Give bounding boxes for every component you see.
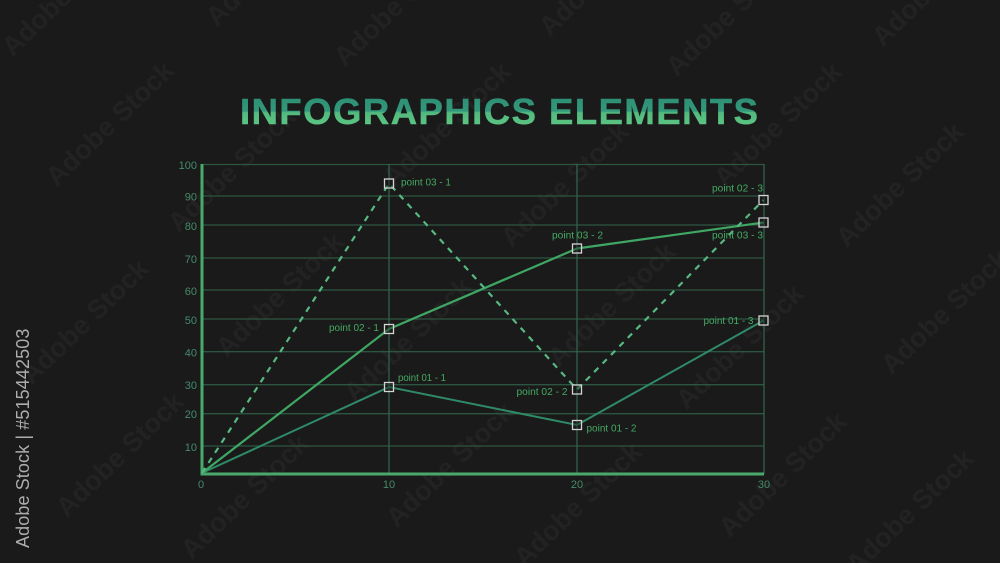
point labels: point 01 - 3	[704, 315, 754, 327]
series 01 line	[202, 320, 764, 473]
x axis labels: 20	[571, 479, 583, 491]
y axis labels	[179, 160, 197, 454]
point labels: point 01 - 1	[398, 372, 446, 384]
watermark pattern: Adobe Stock	[670, 278, 810, 415]
point labels: point 02 - 1	[329, 322, 379, 334]
watermark pattern: Adobe Stock	[210, 226, 350, 363]
watermark pattern: Adobe Stock	[175, 428, 315, 563]
y axis labels: 100	[179, 160, 197, 172]
series 02 solid line	[202, 222, 764, 473]
watermark pattern: Adobe Stock	[830, 116, 970, 253]
line chart	[179, 160, 770, 491]
point labels	[329, 176, 763, 434]
point labels: point 02 - 3	[712, 182, 763, 194]
x axis labels: 0	[198, 479, 204, 491]
watermark pattern: Adobe Stock	[338, 271, 478, 408]
point labels: point 01 - 2	[586, 422, 637, 434]
watermark pattern: Adobe Stock	[708, 56, 848, 193]
y axis labels: 40	[185, 348, 197, 360]
point labels: point 03 - 1	[401, 176, 451, 188]
watermark pattern: Adobe Stock	[15, 253, 155, 390]
point markers	[384, 179, 768, 430]
watermark pattern: Adobe Stock	[380, 396, 520, 533]
y axis labels: 10	[185, 442, 197, 454]
watermark pattern: Adobe Stock	[40, 55, 180, 192]
watermark pattern: Adobe Stock	[162, 101, 302, 238]
point labels: point 02 - 2	[516, 386, 568, 398]
y axis labels: 50	[185, 315, 197, 327]
watermark pattern: Adobe Stock	[495, 116, 635, 253]
y axis labels: 30	[185, 380, 197, 392]
y axis labels: 60	[185, 286, 197, 298]
x axis labels: 30	[758, 479, 770, 491]
x axis labels: 10	[383, 479, 395, 491]
title: INFOGRAPHICS ELEMENTS	[240, 91, 759, 132]
axes	[202, 164, 764, 474]
series 03 dashed line	[202, 184, 764, 473]
watermark pattern: Adobe Stock	[377, 56, 517, 193]
point labels: point 03 - 2	[552, 230, 603, 242]
y axis labels: 20	[185, 409, 197, 421]
y axis labels: 80	[185, 221, 197, 233]
x axis labels	[198, 479, 770, 491]
stock id side text: Adobe Stock | #515442503	[13, 328, 33, 548]
watermark pattern: Adobe Stock	[713, 406, 853, 543]
watermark pattern: Adobe Stock	[50, 386, 190, 523]
point labels: point 03 - 3	[712, 230, 763, 242]
watermark pattern: Adobe Stock	[542, 236, 682, 373]
y axis labels: 90	[185, 192, 197, 204]
y axis labels: 70	[185, 254, 197, 266]
